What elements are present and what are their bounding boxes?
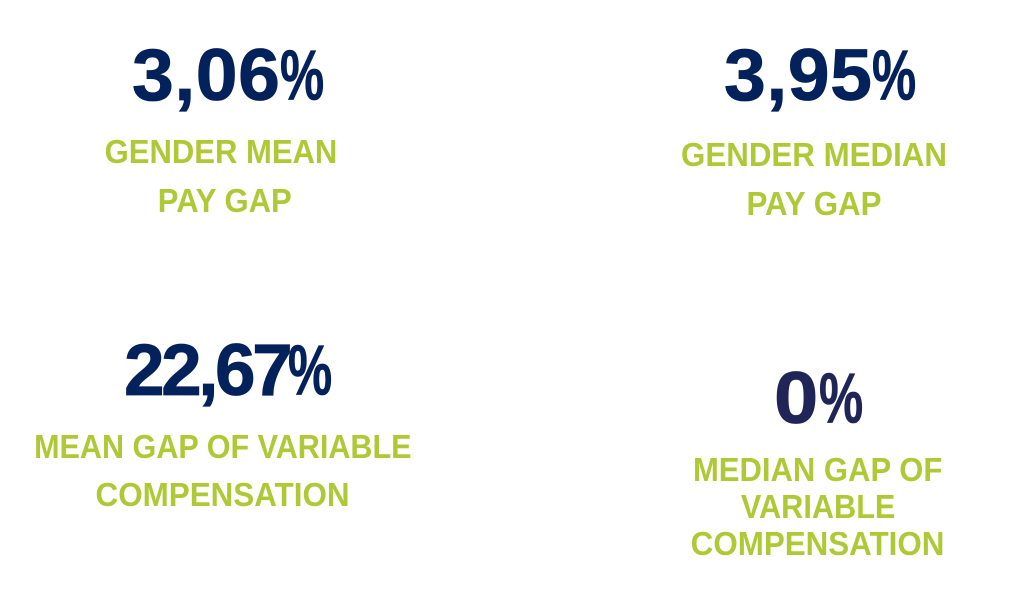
stat: mean gap of variable compensation bbox=[34, 330, 412, 513]
label: median gap of variable compensation: VARIABLE bbox=[741, 488, 895, 525]
label: median gap of variable compensation bbox=[691, 451, 945, 562]
label: median gap of variable compensation: MEDIAN GAP OF bbox=[693, 451, 943, 488]
value: 3,95%: % bbox=[872, 36, 916, 115]
value: 0%: % bbox=[819, 359, 863, 438]
label: mean gap of variable compensation: MEAN GAP OF VARIABLE bbox=[34, 428, 412, 465]
value: 22,67%: 22,67 bbox=[124, 330, 289, 411]
value: 3,06%: 3,06 bbox=[132, 35, 280, 116]
label: gender mean pay gap: GENDER MEAN bbox=[105, 133, 337, 170]
label: mean gap of variable compensation: COMPENSATION bbox=[96, 476, 350, 513]
stat: gender median pay gap bbox=[681, 35, 947, 222]
value: 0%: 0 bbox=[774, 358, 819, 439]
label: gender median pay gap bbox=[681, 136, 947, 222]
label: mean gap of variable compensation bbox=[34, 428, 412, 513]
stat: median gap of variable compensation bbox=[691, 358, 945, 562]
label: gender median pay gap: PAY GAP bbox=[746, 185, 882, 222]
value: 3,06%: % bbox=[280, 36, 324, 115]
value: 3,95%: 3,95 bbox=[724, 35, 872, 116]
label: gender mean pay gap: PAY GAP bbox=[158, 182, 292, 219]
label: gender mean pay gap bbox=[105, 133, 337, 219]
value: 22,67%: % bbox=[288, 331, 332, 410]
stat: gender mean pay gap bbox=[105, 35, 337, 219]
label: median gap of variable compensation: COMPENSATION bbox=[691, 525, 945, 562]
label: gender median pay gap: GENDER MEDIAN bbox=[681, 136, 947, 173]
value: 0% bbox=[774, 358, 863, 439]
